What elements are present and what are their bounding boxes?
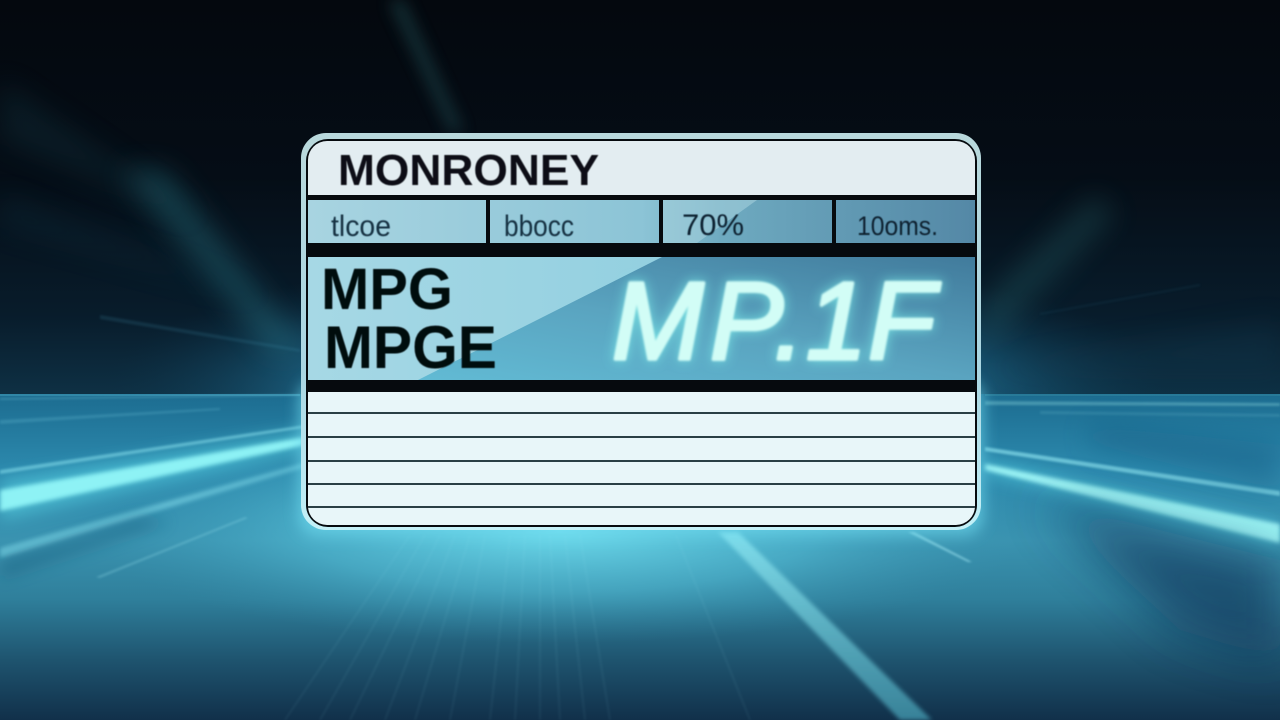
- ruled rows: [308, 392, 975, 526]
- label: MPGE: MPGE: [324, 314, 497, 381]
- card rim: [301, 133, 981, 530]
- card outer glow: [298, 380, 984, 536]
- data row: [308, 200, 975, 243]
- black band above rows: [308, 380, 975, 392]
- black rules: [308, 195, 975, 200]
- heading: MONRONEY: MONRONEY: [338, 146, 599, 195]
- Monroney label card: [301, 133, 981, 530]
- MPG panel: [308, 257, 975, 380]
- lower light streaks: [0, 425, 1280, 720]
- cell label 1: tlcoe: [331, 210, 391, 243]
- label: MPG: MPG: [321, 257, 453, 322]
- cell label 2: bbocc: [504, 210, 574, 243]
- cell value 70%: 70%: [682, 209, 744, 242]
- header strip: [308, 141, 975, 195]
- horizon streaks: [0, 394, 1280, 424]
- lower fan of fine lines: [285, 535, 750, 720]
- card border: [306, 139, 977, 527]
- upper rays: [0, 0, 1280, 370]
- glowing readout: MP.1F: [612, 260, 941, 383]
- cell value 100: 10oms.: [857, 211, 938, 241]
- glowing readout: MP.1F: [612, 260, 941, 383]
